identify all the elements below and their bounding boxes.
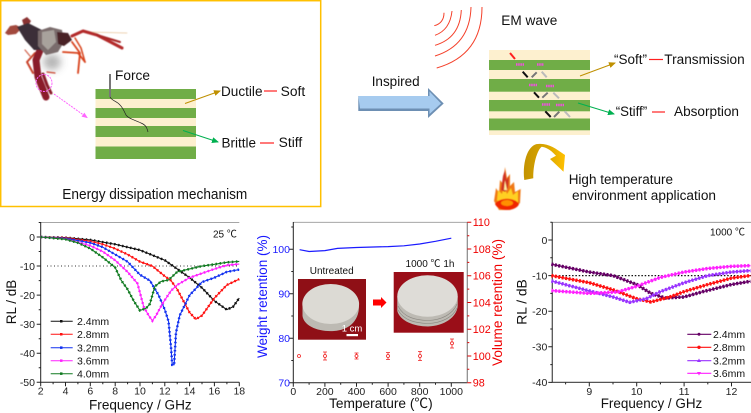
legend: 3.6mm [77, 356, 109, 368]
y tick labels: -20 [20, 290, 35, 302]
y tick labels: -30 [20, 319, 35, 331]
y tick labels: -30 [532, 342, 547, 354]
right tick labels: 106 [473, 270, 491, 282]
axes and ticks [289, 222, 471, 387]
x tick labels: 12 [159, 386, 171, 398]
y tick labels: -50 [20, 377, 35, 389]
arrow: soft [580, 63, 615, 76]
arrow: stiff [578, 103, 614, 114]
right tick labels: 110 [473, 217, 490, 229]
bottom tick labels: 400 [348, 386, 365, 398]
crack path [110, 74, 148, 132]
icon: flame [494, 167, 521, 210]
bottom tick labels: 800 [411, 386, 429, 398]
x tick labels: 11 [679, 386, 690, 398]
x tick labels: 6 [87, 386, 93, 398]
y axis title: RL / dB [514, 279, 530, 325]
y tick labels [20, 232, 35, 389]
axes and ticks [548, 222, 751, 386]
label: Soft - Transmission: “Soft” [614, 52, 647, 67]
y tick labels: -40 [532, 377, 547, 389]
label: Stiff - Absorption: Absorption [674, 104, 739, 119]
photo: untreated discs [298, 279, 366, 340]
photo: heated discs [394, 272, 464, 333]
arrow: magenta dashed pointer [54, 94, 87, 118]
left tick labels: 80 [278, 333, 290, 345]
x tick labels: 8 [112, 386, 118, 398]
weight curve [300, 238, 451, 252]
scale bar: 1 cm [342, 324, 362, 335]
left tick labels: 90 [278, 288, 290, 300]
legend: 4.0mm [77, 368, 109, 380]
legend: 2.8mm [77, 329, 109, 341]
layered structure with wave path [489, 50, 590, 135]
y tick labels [532, 235, 547, 389]
icon: crayfish [5, 17, 127, 97]
x tick labels: 10 [134, 386, 146, 398]
x tick labels: 12 [726, 386, 737, 398]
label: Brittle - Stiff: Stiff [279, 135, 302, 150]
arrow: inspired [358, 88, 444, 118]
right tick labels: 98 [473, 378, 485, 390]
x tick labels: 18 [233, 386, 245, 398]
x tick labels [586, 386, 737, 398]
right tick labels: 102 [473, 324, 491, 336]
label: Soft - Transmission: Transmission [664, 52, 745, 67]
left tick labels: 100 [272, 244, 290, 256]
caption: Energy dissipation mechanism [62, 187, 247, 203]
curves [551, 264, 750, 302]
chart: RL at 1000 °C [514, 222, 751, 411]
arrow: brittle [183, 130, 218, 142]
label: Untreated: Untreated [310, 266, 354, 277]
label: Ductile - Soft [221, 84, 305, 99]
x axis title: Frequency / GHz [89, 398, 192, 412]
legend: 3.6mm [713, 368, 745, 380]
chart frame and ticks [37, 222, 239, 386]
wave scattering marks [510, 53, 570, 117]
bottom tick labels: 0 [290, 386, 296, 398]
legend: 2.8mm [713, 342, 745, 354]
label: Stiff - Absorption: “Stiff” [616, 104, 647, 119]
right tick labels [473, 217, 491, 390]
bottom tick labels: 600 [379, 386, 397, 398]
legend [687, 329, 745, 380]
y tick labels: -20 [532, 306, 547, 318]
x tick labels: 9 [586, 386, 592, 398]
legend [51, 316, 109, 380]
label: Brittle - Stiff: Brittle [222, 135, 256, 150]
legend: 3.2mm [77, 342, 109, 354]
x tick labels [38, 386, 245, 398]
label: Brittle - Stiff [222, 135, 302, 150]
left tick labels: 70 [278, 378, 290, 390]
x axis title: Temperature (℃) [329, 396, 433, 411]
label: Ductile - Soft: Ductile [221, 84, 262, 99]
x tick labels: 4 [63, 386, 69, 398]
legend: 3.2mm [713, 356, 745, 368]
bottom tick labels [290, 386, 463, 398]
right tick labels: 100 [473, 351, 491, 363]
arrow: curved [524, 144, 565, 180]
x tick labels: 16 [209, 386, 220, 398]
right tick labels: 108 [473, 244, 491, 256]
icon: EM wave arcs [434, 7, 482, 68]
arrow: red [373, 297, 386, 308]
y tick labels: 0 [29, 232, 35, 244]
right tick labels: 104 [473, 298, 491, 310]
x tick labels: 10 [631, 386, 643, 398]
left tick labels [272, 244, 290, 390]
left axis title: Weight retention (%) [255, 235, 270, 358]
label: high temperature application [569, 172, 716, 203]
label: Soft - Transmission [614, 52, 745, 67]
label: Inspired: Inspired [372, 74, 420, 89]
y tick labels: -10 [20, 261, 35, 273]
temperature note: 1000 ℃ [710, 228, 745, 239]
label: high temperature application: High temperature [569, 172, 673, 187]
icon: dashed circle on crayfish tail [36, 74, 52, 92]
right axis title: Volume retention (%) [490, 239, 505, 366]
arrow: ductile [185, 91, 220, 104]
legend: 2.4mm [713, 329, 745, 341]
chart: weight and volume retention [255, 217, 505, 411]
label: Ductile - Soft: Soft [281, 84, 305, 99]
curves [41, 237, 239, 365]
label: Force: Force [115, 68, 150, 83]
label: high temperature application: environment application [572, 188, 716, 203]
x tick labels: 14 [184, 386, 196, 398]
x tick labels: 2 [38, 386, 44, 398]
panel: energy dissipation mechanism [1, 1, 321, 207]
label: 1000 C 1h: 1000 ℃ 1h [406, 259, 454, 270]
label: Stiff - Absorption [616, 104, 739, 119]
layered structure [96, 89, 196, 159]
legend: 2.4mm [77, 316, 109, 328]
bottom tick labels: 1000 [440, 386, 463, 398]
y tick labels: 0 [541, 235, 547, 247]
label: EM wave: EM wave [501, 13, 557, 28]
volume data points [298, 339, 454, 360]
y axis title: RL / dB [4, 280, 19, 324]
y tick labels: -10 [532, 270, 547, 282]
y tick labels: -40 [20, 348, 35, 360]
x axis title: Frequency / GHz [601, 396, 703, 411]
chart: RL at 25 °C [4, 222, 245, 412]
temperature note: 25 ℃ [213, 229, 237, 240]
bottom tick labels: 200 [316, 386, 334, 398]
